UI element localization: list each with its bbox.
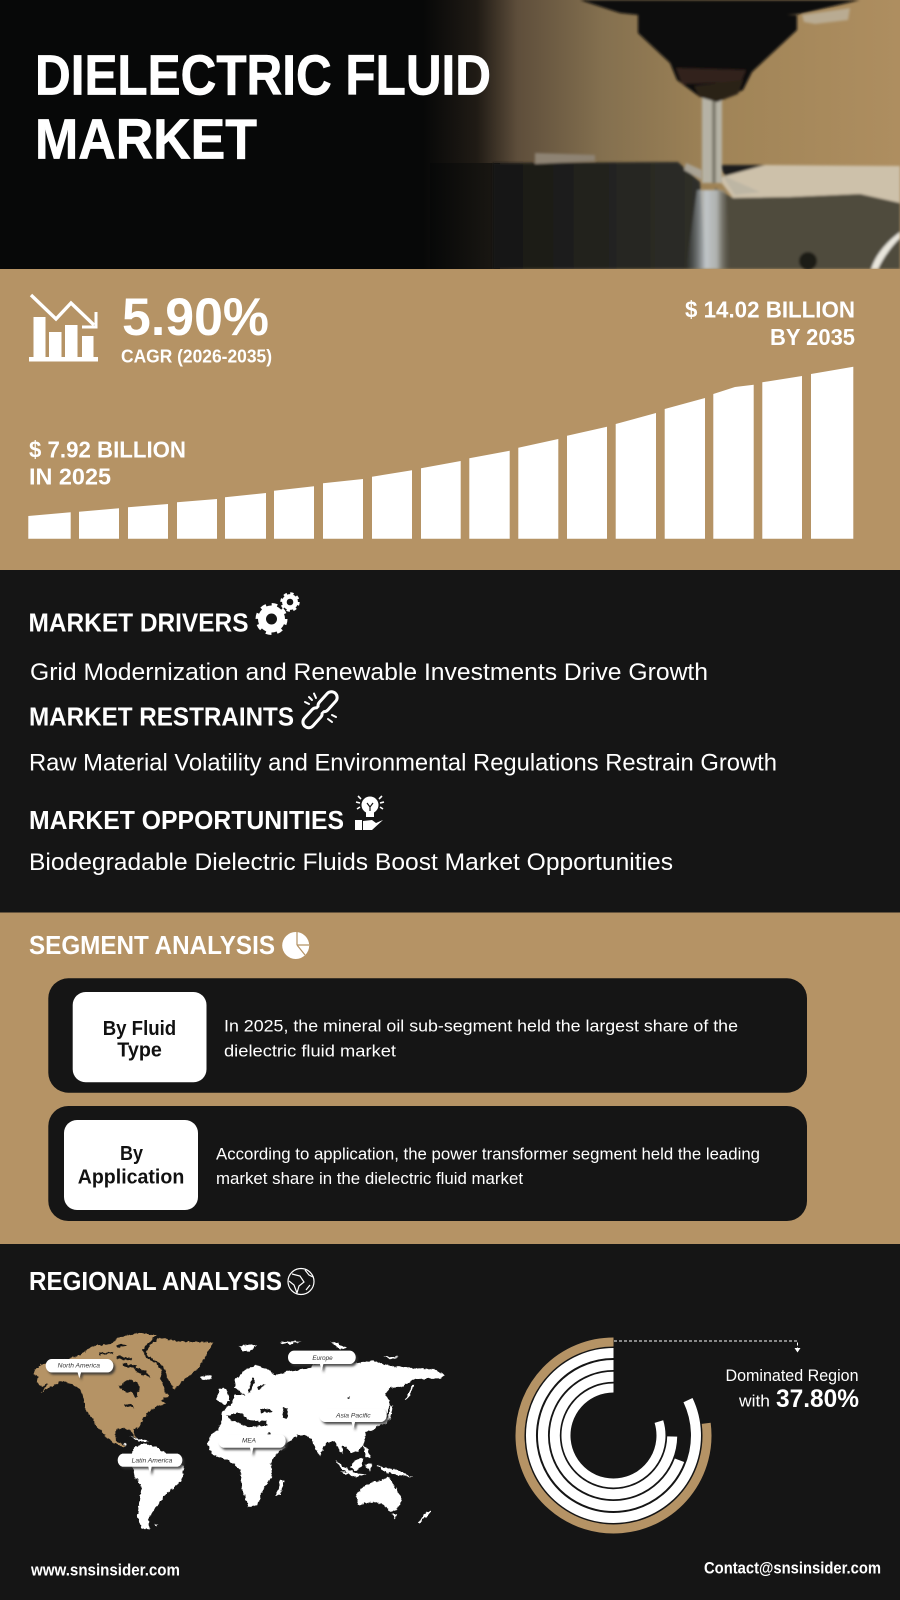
icon: gears <box>257 593 299 634</box>
heading: market restraints: MARKET RESTRAINTS <box>29 704 294 732</box>
panel: segment analysis <box>0 912 900 1244</box>
card: by fluid type: In 2025, the mineral oil sub-segment held the largest share of the <box>224 1016 738 1036</box>
callout: Latin America <box>118 1454 182 1473</box>
panel: drivers, restraints, opportunities <box>0 570 900 913</box>
CAGR value: CAGR (2026-2035) <box>121 346 272 366</box>
text: restraints: Raw Material Volatility and Environmental Regulations Restrain Growth <box>29 750 777 776</box>
title <box>35 44 491 172</box>
callout: MEA <box>218 1434 286 1454</box>
callout: Europe: Europe <box>312 1355 333 1362</box>
seas <box>227 1377 350 1448</box>
CAGR value: 5.90% <box>122 288 269 347</box>
callout: North America: North America <box>58 1363 100 1370</box>
icon: bulb in hand <box>355 796 384 830</box>
title: MARKET <box>35 108 257 172</box>
icon: declining chart <box>29 295 98 362</box>
card: by fluid type: Type <box>117 1038 162 1062</box>
icon: globe <box>288 1268 314 1294</box>
callout: dominated region: Dominated Region <box>726 1366 858 1385</box>
end value: BY 2035 <box>770 324 855 350</box>
callout: dominated region <box>726 1366 859 1413</box>
icon: broken link <box>301 689 340 730</box>
panel: regional analysis <box>0 1244 900 1600</box>
card: by application <box>48 1106 807 1221</box>
card: by application: market share in the dielectric fluid market <box>216 1169 523 1188</box>
map region: North America <box>34 1333 213 1447</box>
card: by application: Application <box>78 1165 184 1188</box>
callout: MEA: MEA <box>242 1438 257 1445</box>
card: by fluid type: By Fluid <box>103 1017 176 1040</box>
world map <box>34 1333 445 1529</box>
callout: Latin America: Latin America <box>132 1457 173 1464</box>
panel: market size and CAGR <box>0 269 900 571</box>
title: DIELECTRIC FLUID <box>35 44 491 108</box>
text: opportunities: Biodegradable Dielectric Fluids Boost Market Opportunities <box>29 849 673 876</box>
start value: $ 7.92 BILLION <box>29 436 186 462</box>
hero banner with machining photo <box>0 0 900 270</box>
radial chart: regional share <box>520 1342 707 1529</box>
workpiece block <box>493 153 900 270</box>
arrow: dashed leader line <box>614 1341 800 1352</box>
card: by fluid type: dielectric fluid market <box>224 1042 396 1060</box>
callout: dominated region: 37.80% <box>776 1385 859 1413</box>
nozzle <box>580 0 860 183</box>
end value: $ 14.02 BILLION <box>685 296 855 322</box>
callout: North America <box>46 1359 113 1378</box>
callout: Asia Pacific: Asia Pacific <box>335 1412 371 1419</box>
callout: Europe <box>288 1351 356 1371</box>
card: by application: According to application, the power transformer segment held the leading <box>216 1144 760 1164</box>
icon: pie chart <box>282 932 309 959</box>
card: by fluid type <box>48 978 807 1093</box>
heading: market opportunities: MARKET OPPORTUNITIES <box>29 807 344 835</box>
footer: website: www.snsinsider.com <box>30 1560 180 1580</box>
map region: rest of world <box>123 1341 445 1529</box>
start value <box>29 436 186 490</box>
heading: segment analysis: SEGMENT ANALYSIS <box>29 932 275 960</box>
end value <box>685 296 855 350</box>
Eurasia and Africa <box>207 1361 445 1507</box>
card: by application: By <box>120 1142 144 1165</box>
heading: regional analysis: REGIONAL ANALYSIS <box>29 1268 282 1296</box>
text: drivers: Grid Modernization and Renewable Investments Drive Growth <box>30 659 708 686</box>
start value: IN 2025 <box>29 464 111 490</box>
callout: dominated region: with <box>738 1392 770 1410</box>
heading: market drivers: MARKET DRIVERS <box>28 610 248 638</box>
callout: Asia Pacific <box>319 1409 387 1429</box>
South America <box>127 1443 184 1529</box>
bar chart: growth <box>28 367 853 539</box>
